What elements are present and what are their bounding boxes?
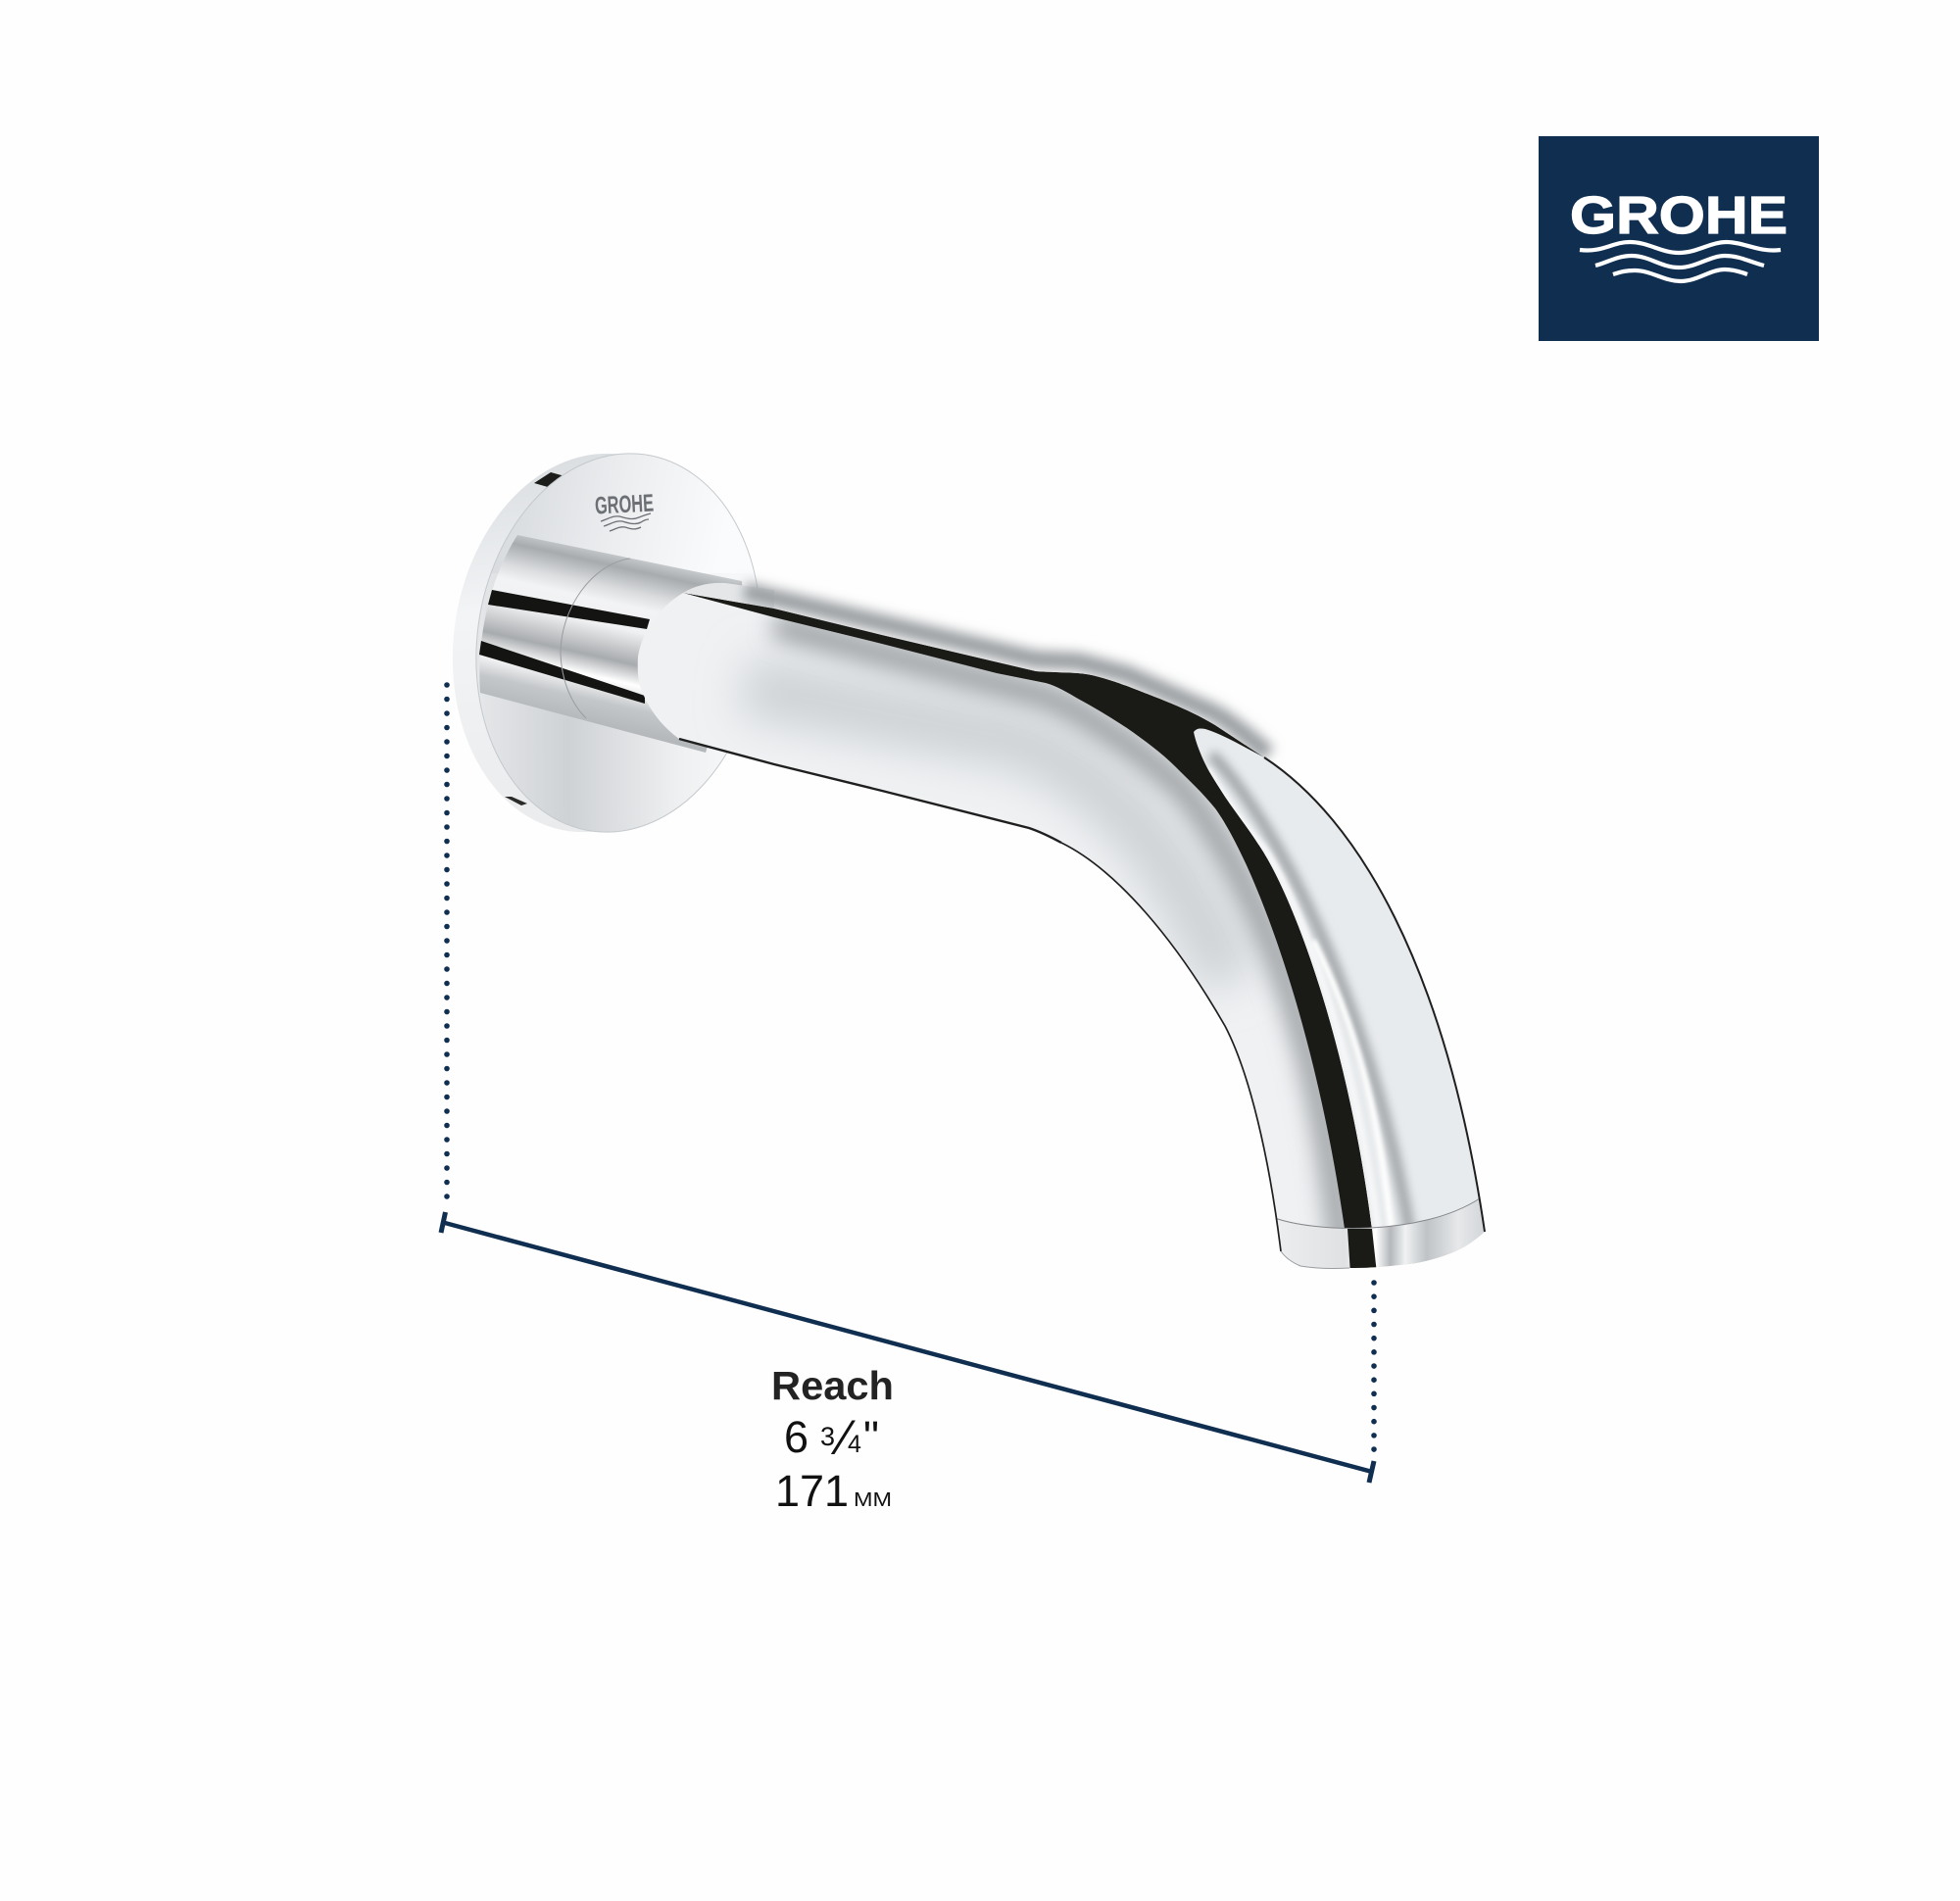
millimetres value: 171 — [775, 1466, 849, 1516]
inches value: " — [863, 1412, 879, 1462]
collar on the disc — [479, 535, 745, 753]
label heading: Reach — [771, 1363, 894, 1408]
left dotted extension line — [444, 685, 450, 1198]
chrome bath spout product illustration — [428, 435, 1509, 1293]
dimension line with end ticks — [441, 1212, 1374, 1483]
inches value: 3 — [820, 1422, 835, 1451]
wall escutcheon disc — [453, 453, 759, 833]
spout tip ring — [1301, 1199, 1485, 1268]
engraved GROHE mark on disc — [594, 489, 655, 531]
teardrop highlight — [1194, 729, 1424, 1264]
GROHE brand logo — [1539, 136, 1819, 341]
reach measurement label — [771, 1363, 894, 1516]
inches value: 4 — [848, 1431, 861, 1458]
reach dimension: dotted extension lines and measure bar — [441, 685, 1374, 1483]
inches value: 6 — [784, 1412, 808, 1462]
spout pipe body — [637, 593, 1485, 1268]
engraved GROHE mark on disc: GROHE — [594, 489, 655, 520]
spout outline strokes — [679, 739, 1485, 1269]
millimetres value — [775, 1466, 892, 1516]
inches value: ⁄ — [830, 1410, 856, 1465]
millimetres value: MM — [854, 1489, 892, 1511]
soft highlight above the pipe — [683, 583, 1268, 755]
GROHE brand logo: GROHE — [1570, 186, 1788, 245]
right dotted extension line — [1371, 1283, 1377, 1451]
dark chrome reflection band — [683, 593, 1377, 1274]
inches value — [784, 1410, 879, 1465]
